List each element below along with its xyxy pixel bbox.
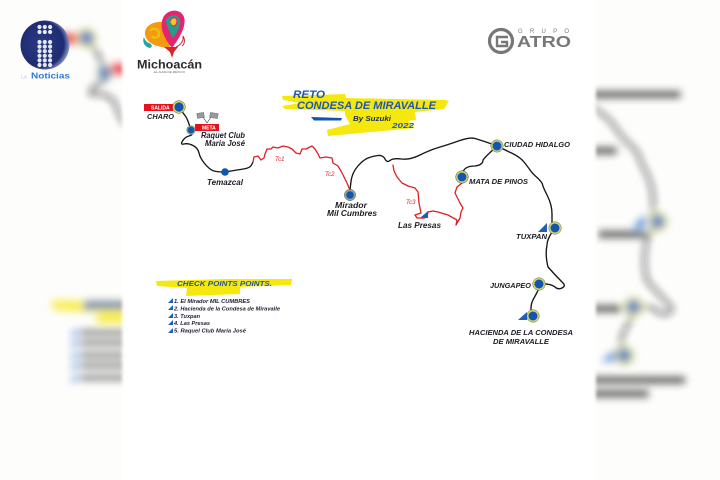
- logo: Noticias sphere: [20, 20, 70, 80]
- label: Meta: [195, 124, 219, 132]
- icon: checkpoint triangles: [420, 211, 547, 320]
- checkpoint list: 4. Las Presas: [173, 321, 210, 327]
- waypoint: Ciudad Hidalgo: [491, 140, 503, 152]
- panel: check points legend: [156, 279, 292, 334]
- icons: list triangles: [168, 298, 173, 333]
- label: Meta: META: [202, 126, 216, 132]
- label: Raquet Club: Raquet Club: [201, 131, 245, 140]
- label: Tc3: Tc3: [406, 200, 416, 206]
- logo: Noticias sphere: La: [21, 74, 27, 80]
- waypoint: Jungapeo: [533, 278, 545, 290]
- waypoint: Raquet Club: [186, 125, 196, 135]
- waypoint: Mata de Pinos: [456, 171, 468, 183]
- title: Reto Condesa de Miravalle: 2022: [391, 123, 414, 130]
- label: Maria José: Maria José: [205, 139, 246, 148]
- logo: Michoacán: [137, 11, 202, 74]
- label: de Miravalle: DE MIRAVALLE: [493, 339, 549, 346]
- icon: checkered flags: [197, 112, 218, 123]
- label: Tc2: Tc2: [325, 172, 335, 178]
- label: Tc1: Tc1: [275, 157, 284, 163]
- waypoint: Temazcal: [221, 168, 229, 176]
- label: Las Presas: Las Presas: [398, 221, 442, 230]
- label: Mirador: Mirador: [335, 201, 368, 210]
- red route: Tc1 and Tc2: [253, 146, 349, 188]
- label: Mil Cumbres: Mil Cumbres: [327, 209, 378, 218]
- checkpoint list: [173, 299, 280, 334]
- red route: Tc3: [393, 165, 463, 225]
- title: Reto Condesa de Miravalle: RETO: [293, 89, 325, 101]
- black route: Charo to Tc1: [179, 107, 253, 172]
- heading: CHECK POINTS POINTS.: [177, 279, 272, 288]
- heading highlight: [156, 279, 292, 296]
- label: Tuxpan: TUXPAN: [516, 234, 548, 241]
- waypoint: Mirador Mil Cumbres: [344, 189, 356, 201]
- checkpoint list: 2. Hacienda de la Condesa de Miravalle: [173, 306, 280, 312]
- black route: Ciudad Hidalgo to Hacienda: [497, 146, 564, 312]
- waypoint: Tuxpan: [549, 222, 561, 234]
- logo: Grupo Atro: [490, 29, 571, 52]
- checkpoint list: 3. Tuxpan: [174, 314, 201, 320]
- title: Reto Condesa de Miravalle: CONDESA DE MIRAVALLE: [297, 100, 437, 112]
- title: Reto Condesa de Miravalle: By Suzuki: [353, 116, 392, 123]
- black route: Ciudad Hidalgo to Mata de Pinos: [463, 148, 495, 172]
- checkpoint list: 1. El Mirador MIL CUMBRES: [174, 299, 250, 305]
- logo: Grupo Atro: ATRO: [517, 34, 571, 51]
- logo: Michoacán: EL ALMA DE MÉXICO: [154, 69, 185, 74]
- label: Temazcal: Temazcal: [207, 178, 244, 187]
- logo: Noticias sphere: Noticias: [31, 70, 70, 80]
- label: Mata de Pinos: MATA DE PINOS: [469, 179, 528, 186]
- central white panel: [122, 0, 596, 480]
- label: Hacienda de la Condesa: HACIENDA DE LA CONDESA: [469, 330, 573, 337]
- waypoint: Charo: [173, 101, 185, 113]
- logo: Grupo Atro: GRUPO: [518, 29, 569, 35]
- label: Salida: [144, 104, 173, 112]
- label: Jungapeo: JUNGAPEO: [490, 283, 532, 290]
- waypoint: Hacienda: [527, 310, 539, 322]
- label: Charo: CHARO: [147, 114, 175, 121]
- blurred enlarged copy of the map behind the panel: [33, 28, 685, 397]
- black route: Mil Cumbres to Ciudad Hidalgo: [350, 138, 497, 190]
- label: Ciudad Hidalgo: CIUDAD HIDALGO: [504, 142, 571, 149]
- logo: Michoacán: Michoacán: [137, 58, 202, 72]
- label: Salida: SALIDA: [151, 106, 170, 112]
- checkpoint list: 5. Raquel Club María José: [174, 328, 246, 334]
- route map: [144, 101, 573, 346]
- title: Reto Condesa de Miravalle: [282, 89, 449, 136]
